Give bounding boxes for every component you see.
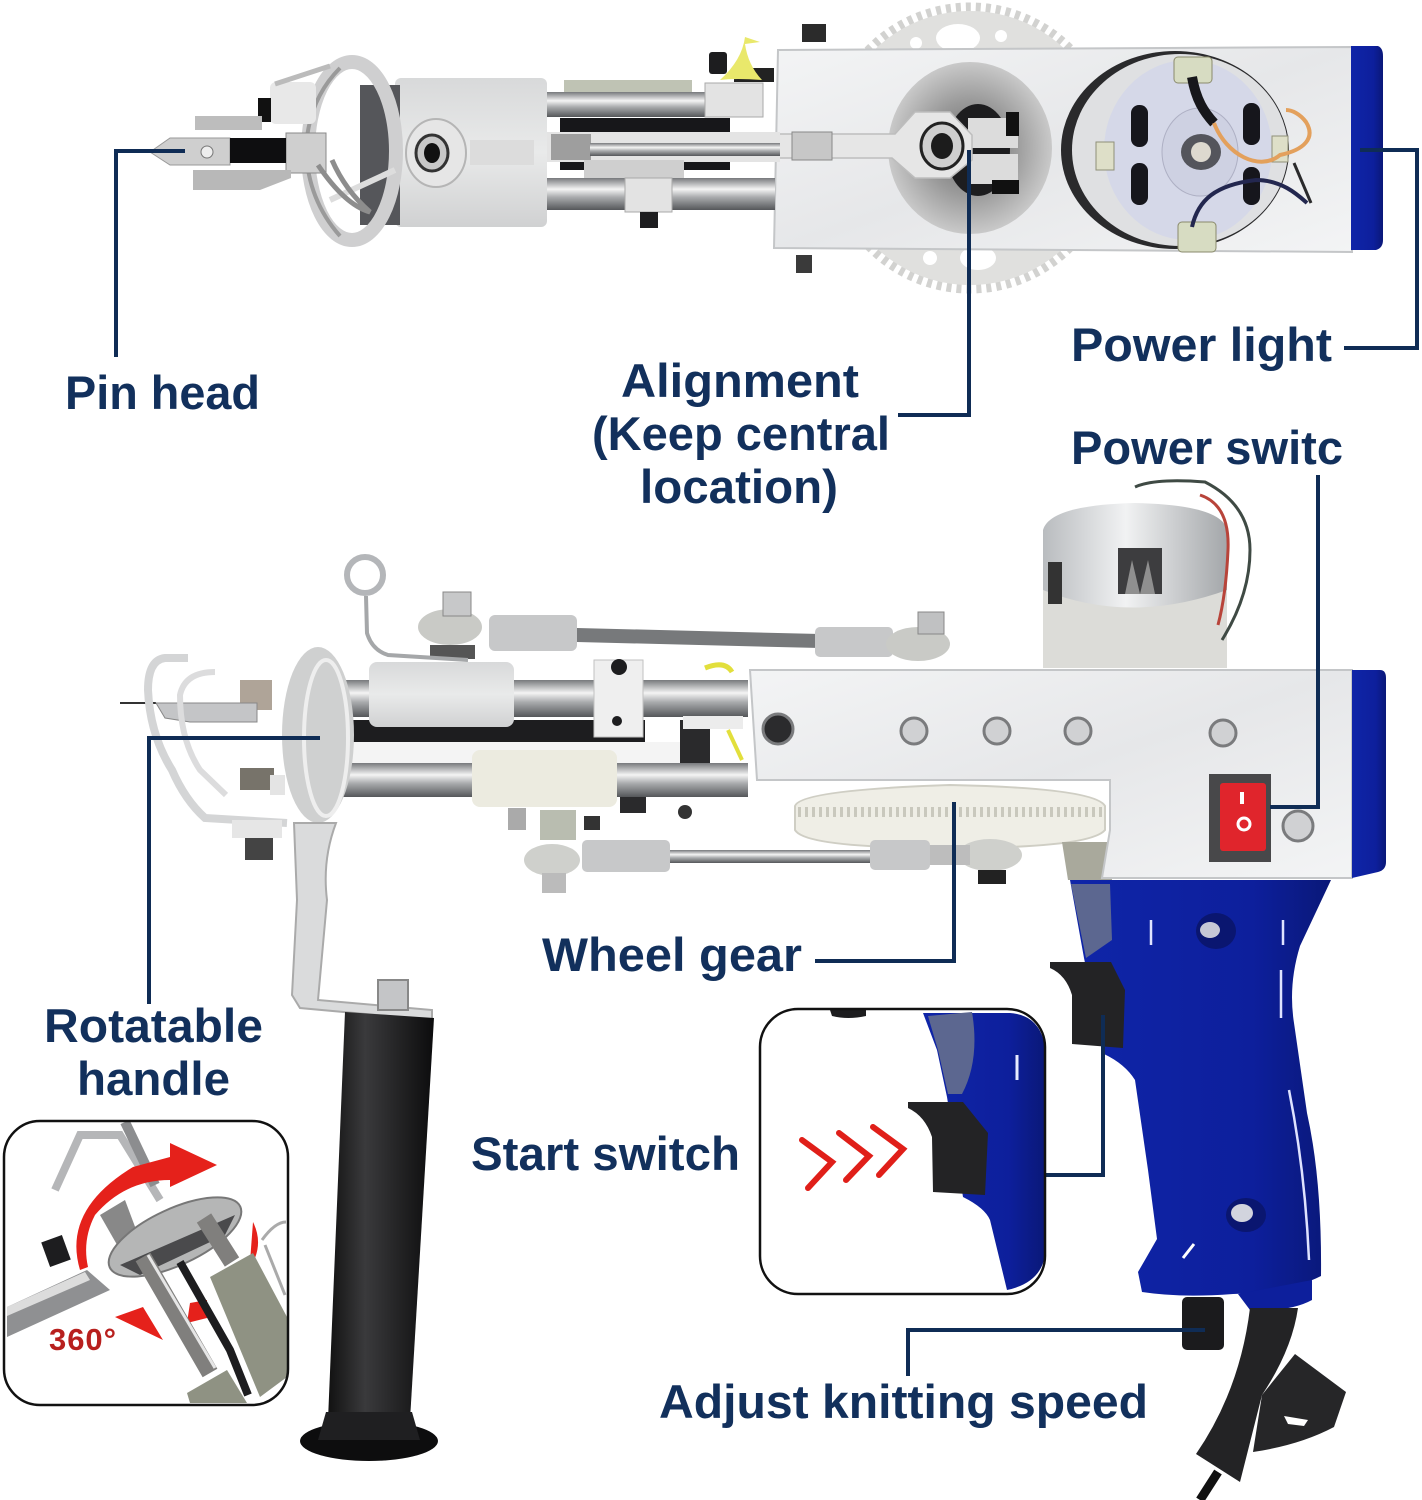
blue end cap: [1351, 46, 1383, 250]
callout: rotatable handle: handle: [77, 1052, 230, 1105]
screws: [763, 714, 1313, 841]
flange and pin head: [150, 62, 400, 240]
rods and rollers: [395, 24, 826, 273]
rear gear wheel: [795, 785, 1105, 848]
red power switch: [1209, 774, 1271, 862]
callout: rotatable handle: [44, 738, 320, 1105]
callout: power light: [1071, 150, 1417, 371]
callout: power light: Power light: [1071, 318, 1332, 371]
callout: wheel gear: [542, 802, 954, 981]
callout: rotatable handle: Rotatable: [44, 999, 263, 1052]
black handle: [300, 980, 438, 1461]
callout: pin head: [65, 151, 260, 419]
power cord and plug: [1182, 1297, 1346, 1500]
callout: power switch: [1071, 421, 1343, 807]
side view tufting gun: [120, 481, 1386, 1500]
callout: wheel gear: Wheel gear: [542, 928, 802, 981]
callout: start switch: Start switch: [471, 1127, 740, 1180]
callout: alignment: (Keep central: [592, 407, 890, 460]
inset: rotating flange 360 degrees: [4, 1121, 288, 1405]
callout: start switch: [471, 1015, 1103, 1180]
callout: alignment: Alignment: [621, 354, 859, 407]
callout: alignment: location): [640, 460, 838, 513]
callout: pin head: Pin head: [65, 366, 260, 419]
blue end cap: [1352, 670, 1386, 878]
callout: power switch: Power switc: [1071, 421, 1343, 474]
label: 360 degrees: 360°: [49, 1322, 116, 1357]
callout: adjust knitting speed: Adjust knitting speed: [659, 1375, 1148, 1428]
rods and blocks: [312, 557, 1022, 893]
callout: alignment: [592, 150, 969, 513]
red rotation arrow bottom: [115, 1300, 207, 1340]
motor: [1043, 481, 1250, 668]
inset: start switch close-up: [760, 1009, 1045, 1294]
handle bracket: [292, 823, 432, 1020]
top view tufting gun: [150, 7, 1383, 289]
red rotation arrow top: [76, 1143, 217, 1270]
blue pistol grip: [1070, 880, 1331, 1310]
start trigger: [1050, 962, 1125, 1048]
grey disc and bearing: [760, 62, 1052, 234]
gear mount: [1062, 842, 1112, 880]
round flange and pin head: [120, 647, 354, 860]
main aluminium housing: [774, 47, 1352, 252]
toothed gear: [829, 7, 1111, 289]
aluminium housing: [750, 670, 1352, 878]
callout: adjust knitting speed: [659, 1330, 1205, 1428]
motor seen from the back: [1061, 51, 1311, 252]
red chevrons: [802, 1127, 903, 1188]
